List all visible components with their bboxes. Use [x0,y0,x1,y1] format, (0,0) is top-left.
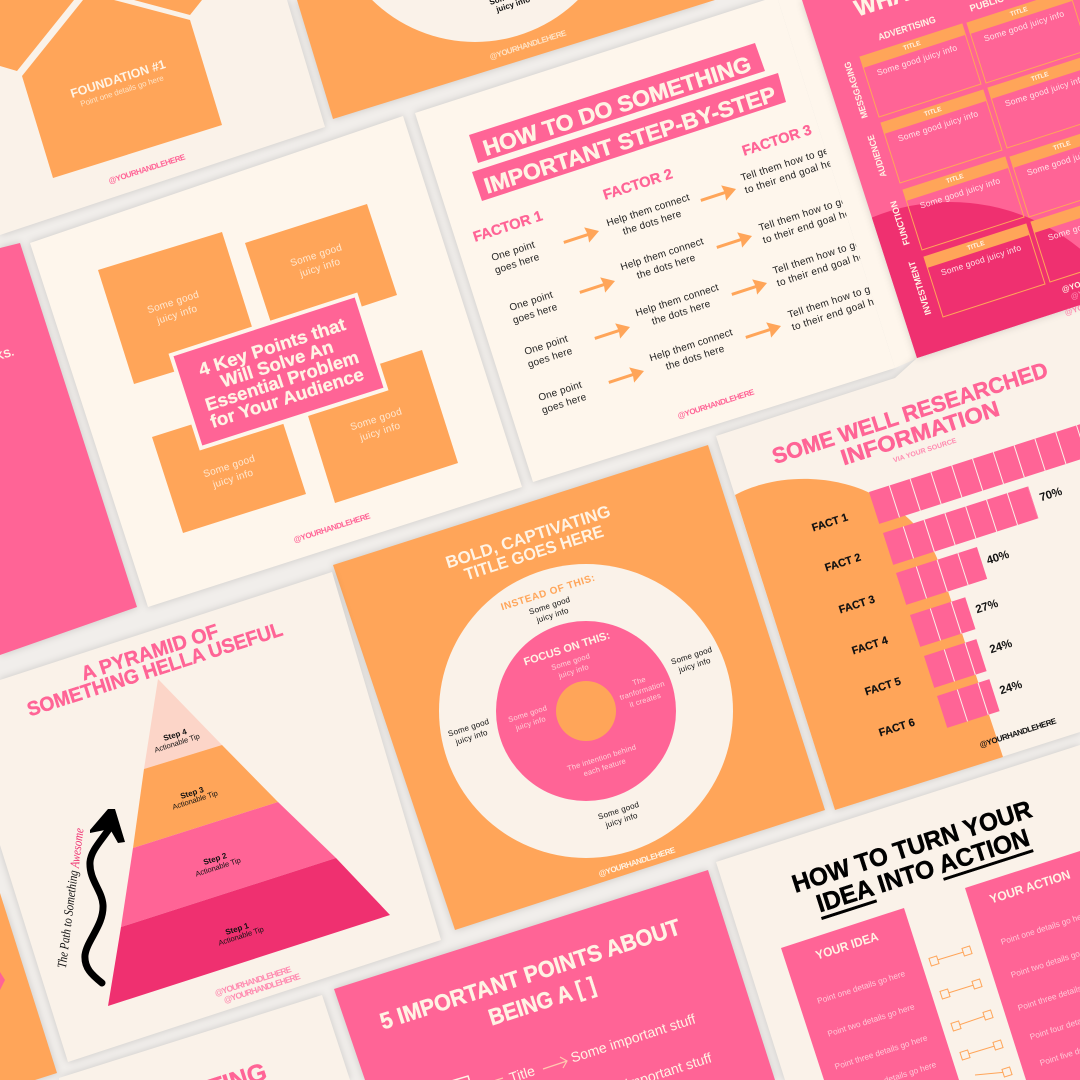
bar labels: FACT 6 [878,717,916,739]
factor 1: FACTOR 1 [471,208,545,246]
inner items: juicy info [513,714,547,732]
pyramid labels: Step 4 [162,727,188,743]
column 3 text: Tell them how to get [771,237,865,277]
column 1 text: goes here [526,345,574,370]
cell titles: TITLE [1009,6,1029,18]
block text 4: Some good [349,406,403,433]
column 2 text: Help them connect [619,236,705,273]
inner items: Some good [507,703,548,724]
action heading: YOUR ACTION [988,867,1072,907]
block: top left [98,232,258,384]
idea points: Point two details go here [826,1001,916,1039]
pyramid labels: Actionable Tip [217,925,265,947]
bar: fact 5 [924,639,987,688]
center title box [171,295,386,448]
title line 1: HOW TO DO SOMETHING [480,51,754,161]
row arrow [543,1057,567,1069]
center title: for Your Audience [208,364,366,432]
column 3 text [739,142,890,333]
bar labels: FACT 5 [864,676,902,698]
bar: fact 6 [937,679,1000,728]
cell outlines [860,0,1080,317]
pyramid labels [153,727,265,947]
column 3 text: to their end goal here [775,247,875,289]
percent labels: 27% [974,598,1000,616]
outer items: juicy info [534,605,570,624]
outer circle [439,564,733,858]
idea panel [781,908,959,1080]
column 1 text: goes here [540,391,588,416]
arrows second column [698,181,783,345]
column 1 text: goes here [493,251,541,276]
block: bottom right [300,350,458,503]
cell text: Some good juicy info [876,42,958,78]
column 2 text: Help them connect [605,192,691,229]
cell text: Some good juicy info [983,8,1065,44]
icon: star [0,972,5,990]
column heads: ADVERTISING [877,15,937,43]
inner items: The [631,674,647,687]
cell titles [902,6,1072,252]
handles: @YOURHANDLEHERE [213,964,293,998]
factor 2: FACTOR 2 [601,166,675,204]
small arrow [487,1078,503,1080]
panel: foundation card [0,0,325,235]
percent labels: 70% [1038,486,1064,504]
handle: @YOURHANDLEHERE [677,387,756,421]
foundation heading: FOUNDATION #1 [69,57,167,101]
panel: what matrix [801,0,1080,360]
title line 1: 5 IMPORTANT POINTS ABOUT [377,914,683,1034]
pyramid labels: Actionable Tip [194,856,242,878]
panel: how to do something [415,0,918,482]
panel: top orange card [297,0,715,119]
bar labels: FACT 4 [851,634,890,657]
cell text: Some good juicy info [919,175,1001,211]
factor 3: FACTOR 3 [740,122,814,160]
title bar 1 [469,43,765,163]
handles: @YOURHANDLEHERE [222,971,302,1005]
percent labels [974,486,1064,697]
title line 1: BOLD, CAPTIVATING [443,502,613,572]
column 1 text: One point [537,379,583,403]
block text 1: juicy info [155,303,199,327]
column 3 text: Tell them how to get [786,281,880,321]
block: bottom left [152,398,306,533]
action panel [965,851,1080,1080]
outer items: Some good [597,799,640,821]
cell titles: TITLE [1030,71,1050,83]
cell titles: TITLE [966,240,986,252]
percent labels: 40% [985,549,1011,567]
column 2 text: Help them connect [634,282,720,319]
bar: fact 3 [896,547,987,605]
inner circle [496,621,676,801]
row heads: INVESTMENT [907,259,933,316]
block text 3: Some good [202,453,256,480]
cell text: Some good juicy info [897,108,979,144]
column 2 text: the dots here [621,208,683,237]
handle: @YOURHANDLEHERE [979,716,1058,750]
source: VIA YOUR SOURCE [893,437,958,464]
handle: @YOURHANDLEHERE [598,845,677,879]
pyramid [108,679,390,1006]
title line 1: HOW TO TURN YOUR [789,795,1035,899]
percent labels: 24% [988,638,1014,656]
pyramid labels: Step 1 [224,921,250,937]
outer items: Some good [670,644,713,666]
column 3 text: to their end goal here [761,204,861,246]
block text 2: Some good [289,242,343,269]
icon: wavy arrow [85,809,125,983]
bar labels: FACT 2 [824,552,862,574]
handle: @YOURHANDLEHERE [489,28,568,62]
outer items: juicy info [603,810,639,829]
panel: bold captivating circles [333,445,825,930]
column 3 text: Tell them how to get [757,194,851,234]
core circle [556,681,616,741]
column 1 text: goes here [511,301,559,326]
column 3 text: to their end goal here [743,154,843,196]
orange backdrop [735,479,1003,810]
bar labels: FACT 3 [838,594,876,616]
outer items: Some good [528,594,571,616]
percent labels: 24% [998,679,1024,697]
handle: @YOURHANDLEHERE [108,152,187,186]
column 3 text: to their end goal here [790,291,890,333]
panel: bottom left orange card [0,893,57,1080]
bar: fact 4 [910,597,975,647]
dark arc [872,202,1080,358]
inner items: The intention behind [566,742,637,773]
column 3 text: Tell them how to get [739,144,833,184]
foundation block [22,0,222,178]
column 1 text: One point [490,239,536,263]
idea heading: YOUR IDEA [814,929,880,963]
cell titles: TITLE [923,106,943,118]
bar: fact 2 [883,486,1038,565]
panel: bottom cream card [59,995,350,1080]
column 2 text [605,192,738,376]
panel: idea into action [716,745,1080,1080]
panel: pyramid [0,572,441,1062]
arrows first column [561,223,646,390]
title bar 2 [472,73,786,201]
cell titles: TITLE [1052,140,1072,152]
outer items: juicy info [453,727,489,746]
bar labels: FACT 1 [811,512,849,534]
row heads [842,60,933,316]
cell titles: TITLE [902,40,922,52]
inner items: it creates [628,690,662,709]
outer items [447,594,716,831]
outer label: INSTEAD OF THIS: [500,573,596,613]
center title: Essential Problem [203,347,361,415]
icon: box [448,1076,476,1080]
title line 2: SOMETHING HELLA USEFUL [25,619,285,721]
cream circle [328,0,622,42]
cell headers [860,0,1080,268]
pyramid labels: Actionable Tip [171,789,219,811]
block text 2: juicy info [298,256,342,280]
inner items: each feature [582,756,627,778]
block text 4: juicy info [358,420,402,444]
column 1 text [489,239,588,416]
title line 1: A PYRAMID OF [79,621,221,685]
foundation detail: Point one details go here [79,73,165,109]
bar labels [811,512,916,739]
cell text [876,8,1080,278]
inner label: FOCUS ON THIS: [522,630,612,668]
column 2 text: the dots here [635,252,697,281]
title line 2: BEING A [ ] [485,972,599,1030]
column 1 text: One point [523,333,569,357]
cell titles: TITLE [945,173,965,185]
inner items: juicy info [556,662,590,680]
outer items: juicy info [676,655,712,674]
cell text: Some good juicy info [940,242,1022,278]
inner items: tranformation [618,679,666,701]
idea points: Point one details go here [816,968,907,1006]
title line 2: TITLE GOES HERE [462,522,606,584]
row text: Some important stuff [569,1010,697,1065]
outer items: Some good [447,716,490,738]
connectors [929,946,1012,1077]
handle: @YOURHANDLEHERE [293,511,372,545]
inner items [507,651,669,782]
row heads: FUNCTION [888,200,912,246]
idea points: Point three details go here [833,1032,929,1072]
vertical script text: The Path to Something Awesome [54,827,86,969]
title line 2: INFORMATION [838,396,1002,470]
action points [999,909,1080,1068]
center title [196,314,366,432]
block text 3: juicy info [211,467,255,491]
column 2 text: the dots here [650,298,712,327]
block: top right [245,204,397,335]
panel: left pink card [0,243,137,655]
center title: Will Solve An [218,337,336,391]
panel: 5 important points [334,870,775,1080]
column 1 text: One point [508,289,554,313]
center title: 4 Key Points that [196,314,348,380]
pyramid labels: Actionable Tip [153,732,201,754]
title: SOME WELL RESEARCHED [769,357,1051,469]
column 2 text: Help them connect [648,327,734,364]
title line 2: IMPORTANT STEP-BY-STEP [481,81,779,199]
pyramid labels: Step 3 [179,785,205,801]
row heads: AUDIENCE [866,134,888,178]
panel: researched information [716,305,1080,810]
row heads: MESSGAGING [842,60,870,120]
column 2 text: the dots here [664,343,726,372]
title line 2: IDEA INTO ACTION [813,824,1033,918]
inner items: Some good [550,651,591,672]
pyramid labels: Step 2 [202,851,228,867]
panel: 4 key points [30,116,522,607]
column heads [877,0,1006,43]
bar: fact 1 [869,413,1080,524]
idea points [816,968,938,1080]
block text 1: Some good [146,289,200,316]
